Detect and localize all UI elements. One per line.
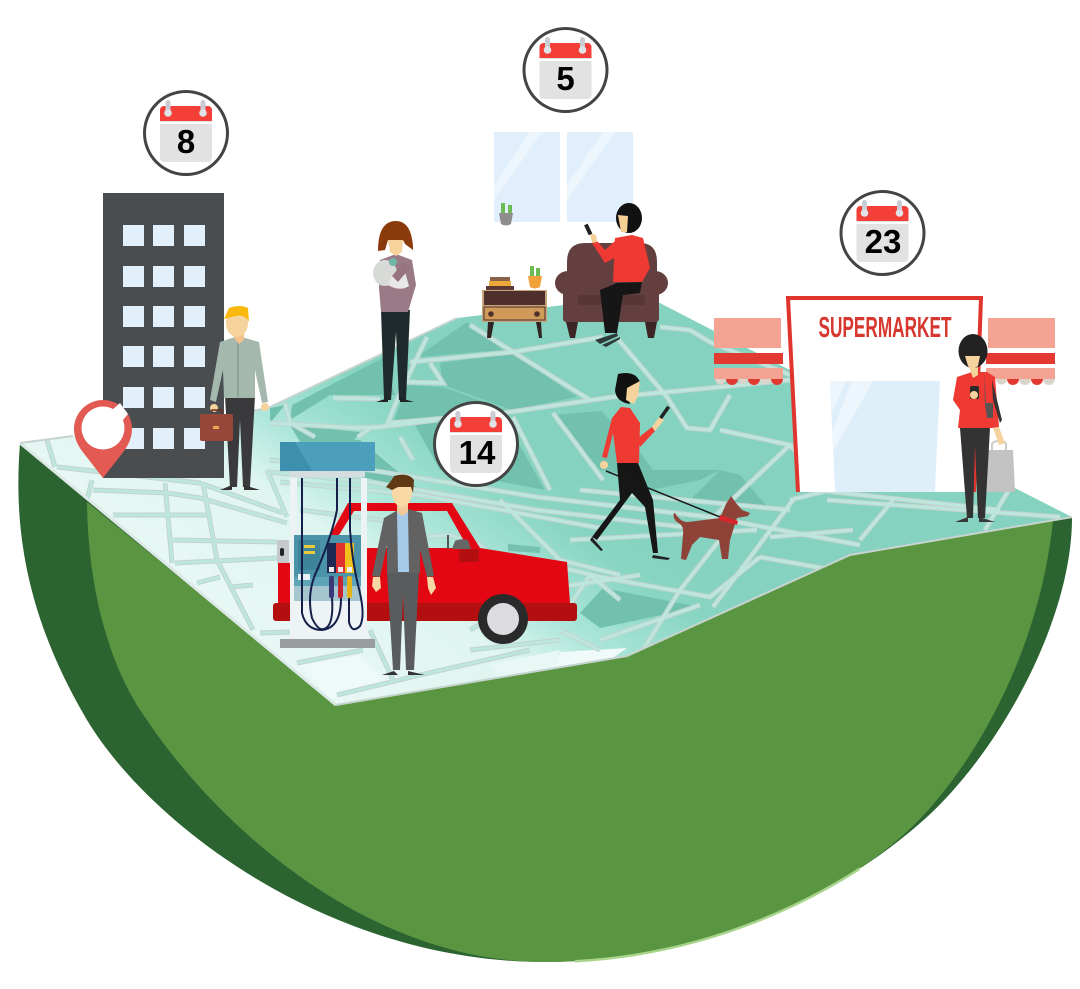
- man in suit: [372, 475, 436, 675]
- map surface: [20, 303, 1072, 705]
- fuel pump: [277, 442, 375, 648]
- hemisphere base: [18, 443, 1072, 962]
- woman with shopping bag: [953, 334, 1015, 522]
- supermarket: [788, 298, 981, 492]
- dog: [674, 496, 750, 560]
- badge: 5 days: [524, 28, 607, 112]
- store sign: SUPERMARKET: [818, 312, 952, 344]
- red car: [273, 503, 577, 644]
- office building: [103, 193, 224, 478]
- map edges: [20, 318, 1072, 705]
- badge: 23 days: [841, 192, 924, 274]
- armchair: [555, 243, 668, 338]
- man with briefcase: [200, 306, 269, 490]
- badge: 14 days: [434, 402, 518, 486]
- badge: 8 days: [144, 92, 228, 174]
- right awning: [986, 318, 1055, 385]
- woman walking dog: [590, 373, 720, 560]
- left awning: [714, 318, 783, 385]
- side table with books and plant: [482, 266, 547, 338]
- woman holding baby: [373, 221, 416, 402]
- badge: 5 days: 5: [556, 60, 575, 97]
- seated woman with phone: [584, 203, 650, 347]
- location pin: [74, 400, 132, 478]
- window with plant: [494, 132, 633, 226]
- badge: 14 days: 14: [459, 434, 496, 471]
- badge: 8 days: 8: [177, 123, 195, 160]
- badge: 23 days: 23: [865, 223, 901, 260]
